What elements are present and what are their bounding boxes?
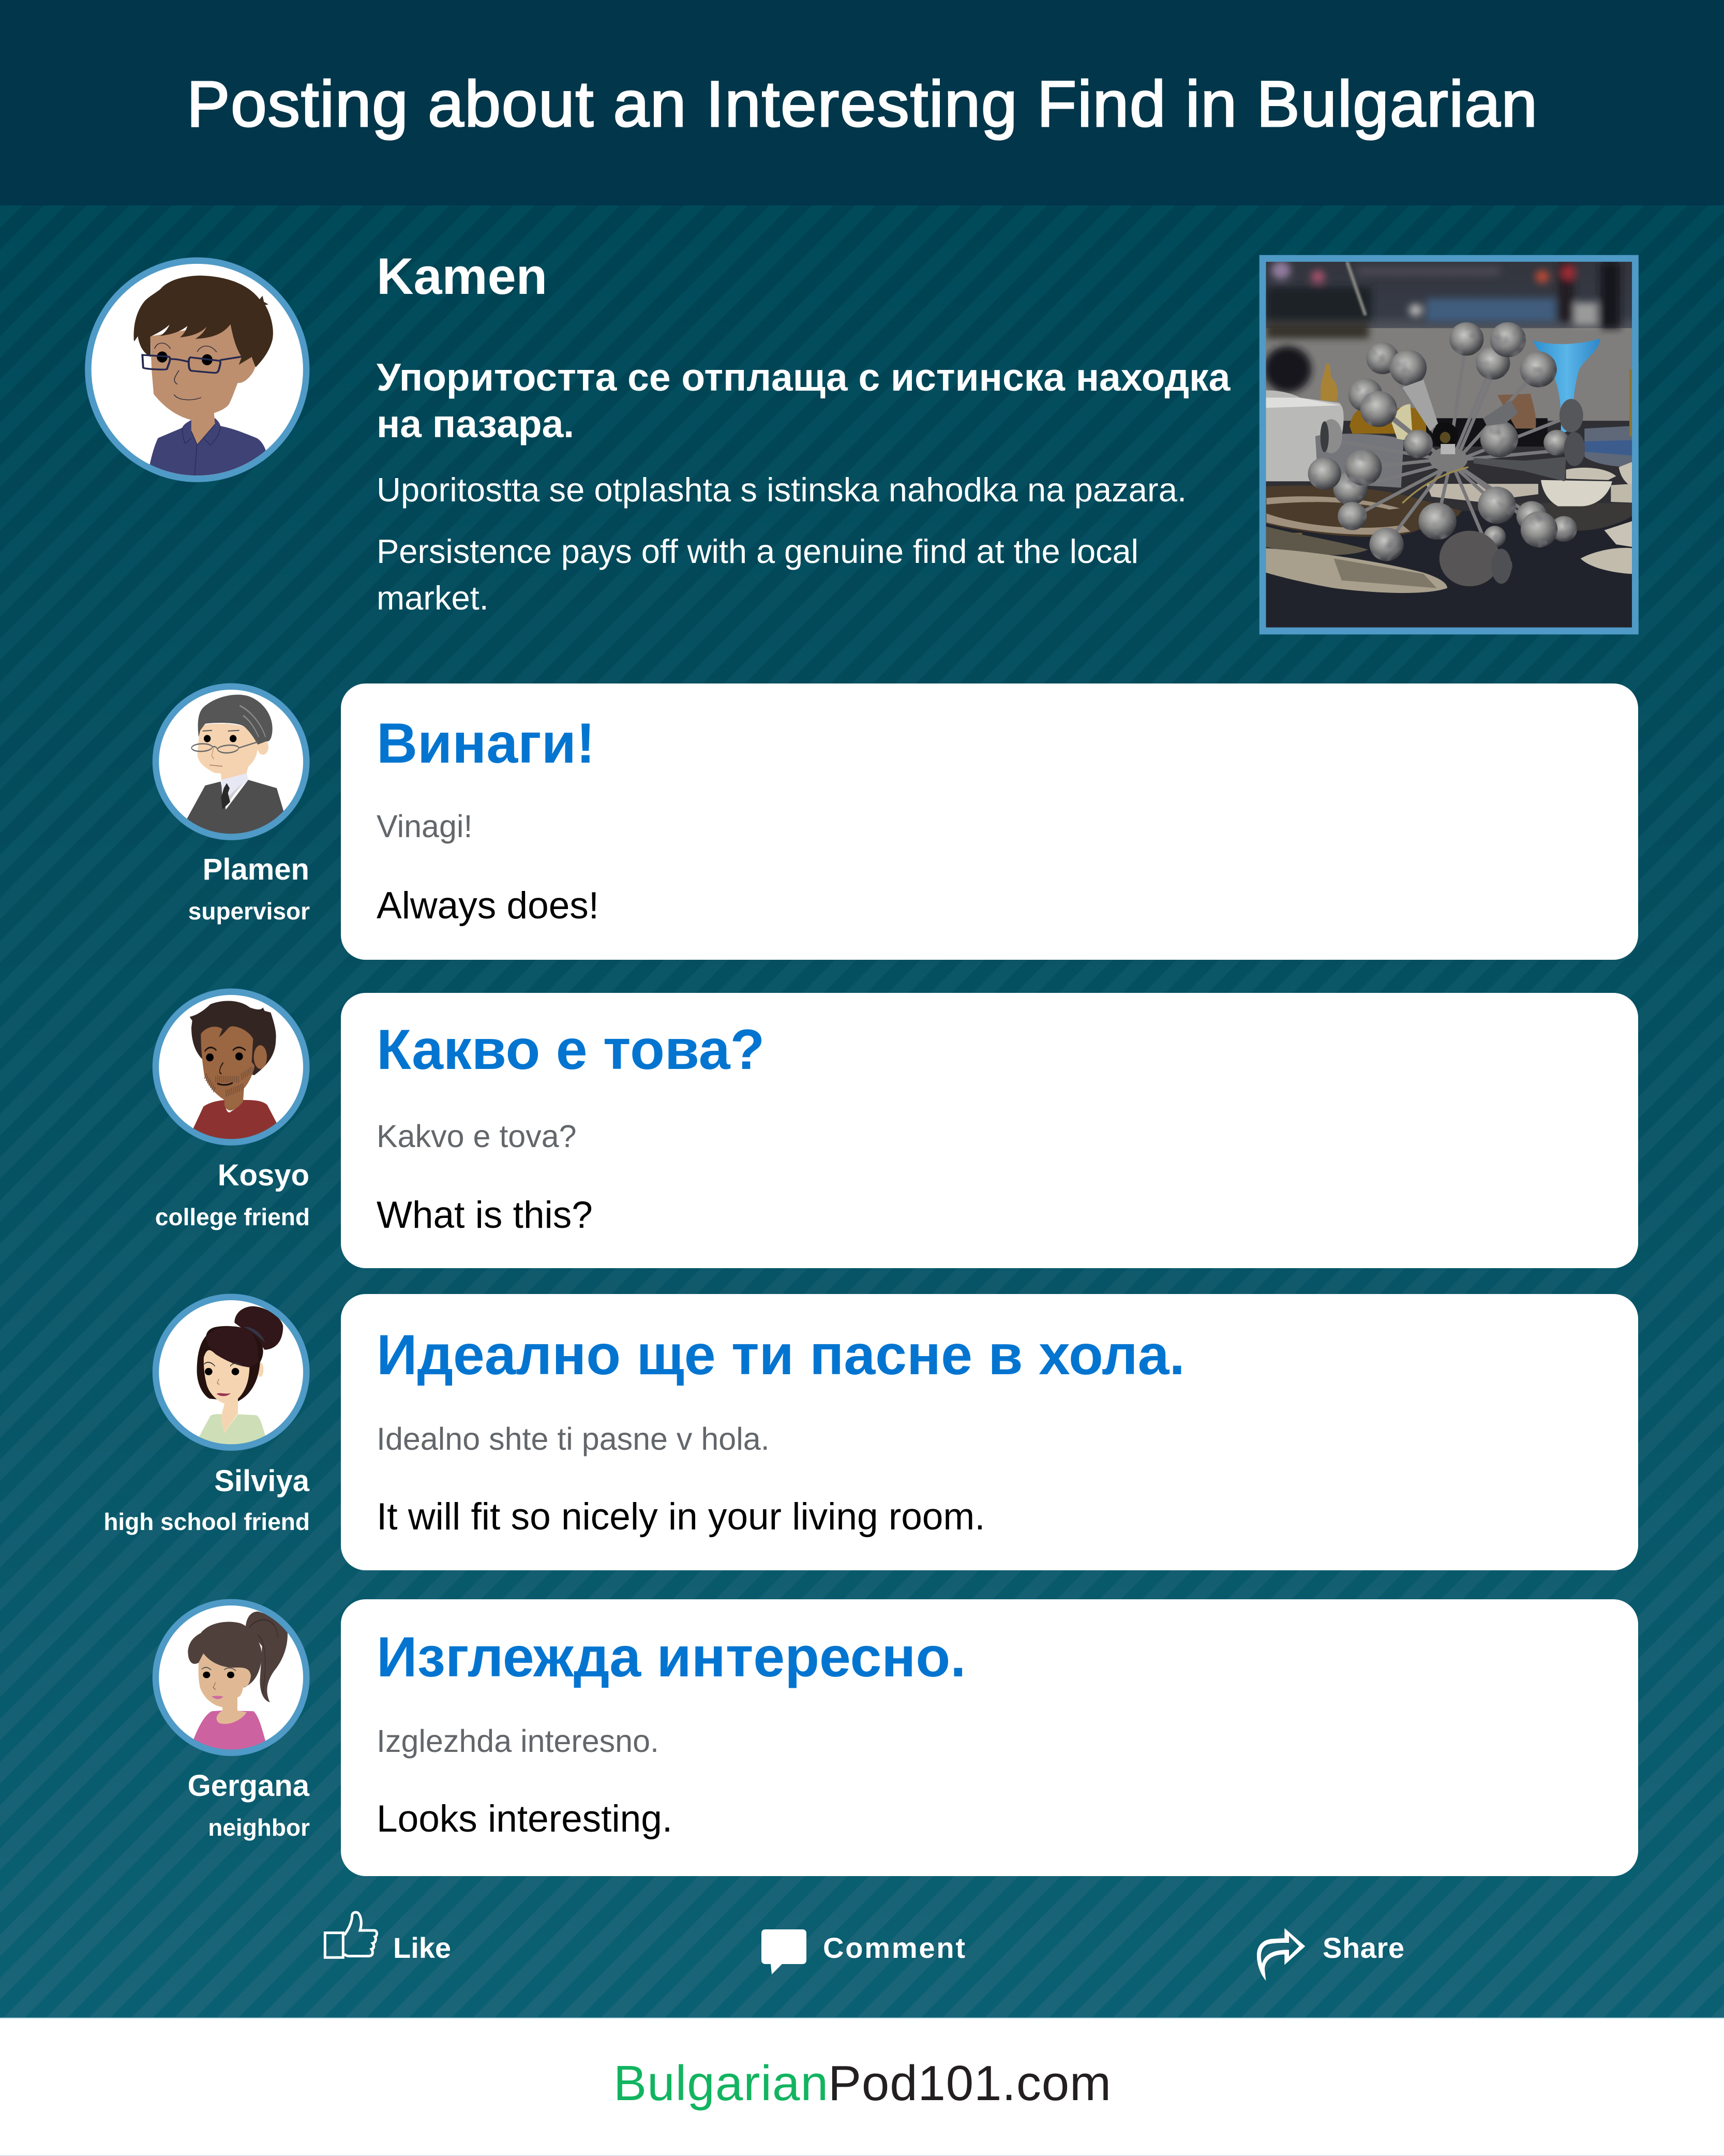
avatar: Plamen [156,687,306,838]
Silviya label: high school friend [103,1508,310,1535]
reply card: Gergana: Изглежда интересно. [377,1626,966,1689]
reply card: Plamen: Винаги! [377,712,595,775]
Gergana label [188,1769,310,1841]
Kamen post translation: Persistence pays off with a genuine find at the local [377,532,1138,570]
lamp rods [1365,394,1560,534]
Plamen label: supervisor [188,898,310,925]
Plamen label [188,853,310,925]
footer logo: Pod101.com [828,2056,1111,2111]
avatar: Kosyo [156,992,306,1144]
Comment action [761,1929,965,1974]
reply card: Plamen: Always does! [377,885,599,927]
icon: share arrow [1257,1928,1305,1981]
reply card: Kosyo [341,993,1638,1268]
Share action: Share [1323,1931,1404,1964]
Gergana label: Gergana [188,1769,310,1803]
reply card: Kosyo: Какво е това? [377,1018,764,1081]
Kamen post romanization: Uporitostta se otplashta s istinska nahodka na pazara. [377,471,1187,509]
Kamen name: Kamen [377,247,547,305]
Silviya label [103,1464,310,1535]
Silviya label: Silviya [214,1464,310,1498]
reply card: Kosyo: What is this? [377,1194,593,1236]
reply card: Gergana [341,1599,1638,1876]
Kosyo label: Kosyo [218,1158,309,1192]
Comment action: Comment [823,1931,965,1964]
Share action [1257,1928,1404,1981]
Kosyo label [155,1158,310,1230]
reply card: Plamen [341,683,1638,960]
avatar: Gergana [156,1602,306,1755]
avatar: Kamen [88,261,306,479]
lamp balls [1308,322,1577,577]
title: Posting about an Interesting Find in Bulgarian [187,68,1537,140]
Kamen post translation: market. [377,579,489,617]
Like action: Like [393,1931,451,1964]
reply card: Gergana: Izglezhda interesno. [377,1723,659,1759]
photo background [1266,262,1632,328]
Kosyo label: college friend [155,1203,310,1230]
footer band [0,2017,1724,2156]
footer logo: Bulgarian [613,2056,828,2111]
header band [0,0,1724,205]
reply card: Kosyo: Kakvo e tova? [377,1119,577,1154]
icon: speech bubble [761,1929,806,1974]
Kamen post translation [377,532,1138,617]
Kamen post in Bulgarian [377,355,1231,445]
reply card: Gergana: Looks interesting. [377,1798,672,1840]
reply card: Plamen: Vinagi! [377,809,472,844]
photo: flea market sputnik lamp [1260,255,1639,634]
reply card: Silviya [341,1294,1638,1570]
Plamen label: Plamen [203,853,309,886]
reply card: Silviya: Idealno shte ti pasne v hola. [377,1421,770,1456]
reply card: Silviya: It will fit so nicely in your living room. [377,1496,985,1538]
Gergana label: neighbor [208,1814,310,1841]
photo table and objects [1266,421,1632,518]
icon: thumbs up [325,1912,377,1957]
footer logo [613,2056,1111,2111]
reply card: Silviya: Идеално ще ти пасне в хола. [377,1324,1185,1387]
Like action [325,1912,451,1964]
Kamen post in Bulgarian: Упоритостта се отплаща с истинска находка [377,355,1231,399]
lamp cups and tubes [1320,419,1342,453]
Kamen post in Bulgarian: на пазара. [377,402,574,445]
avatar: Silviya [156,1297,306,1448]
